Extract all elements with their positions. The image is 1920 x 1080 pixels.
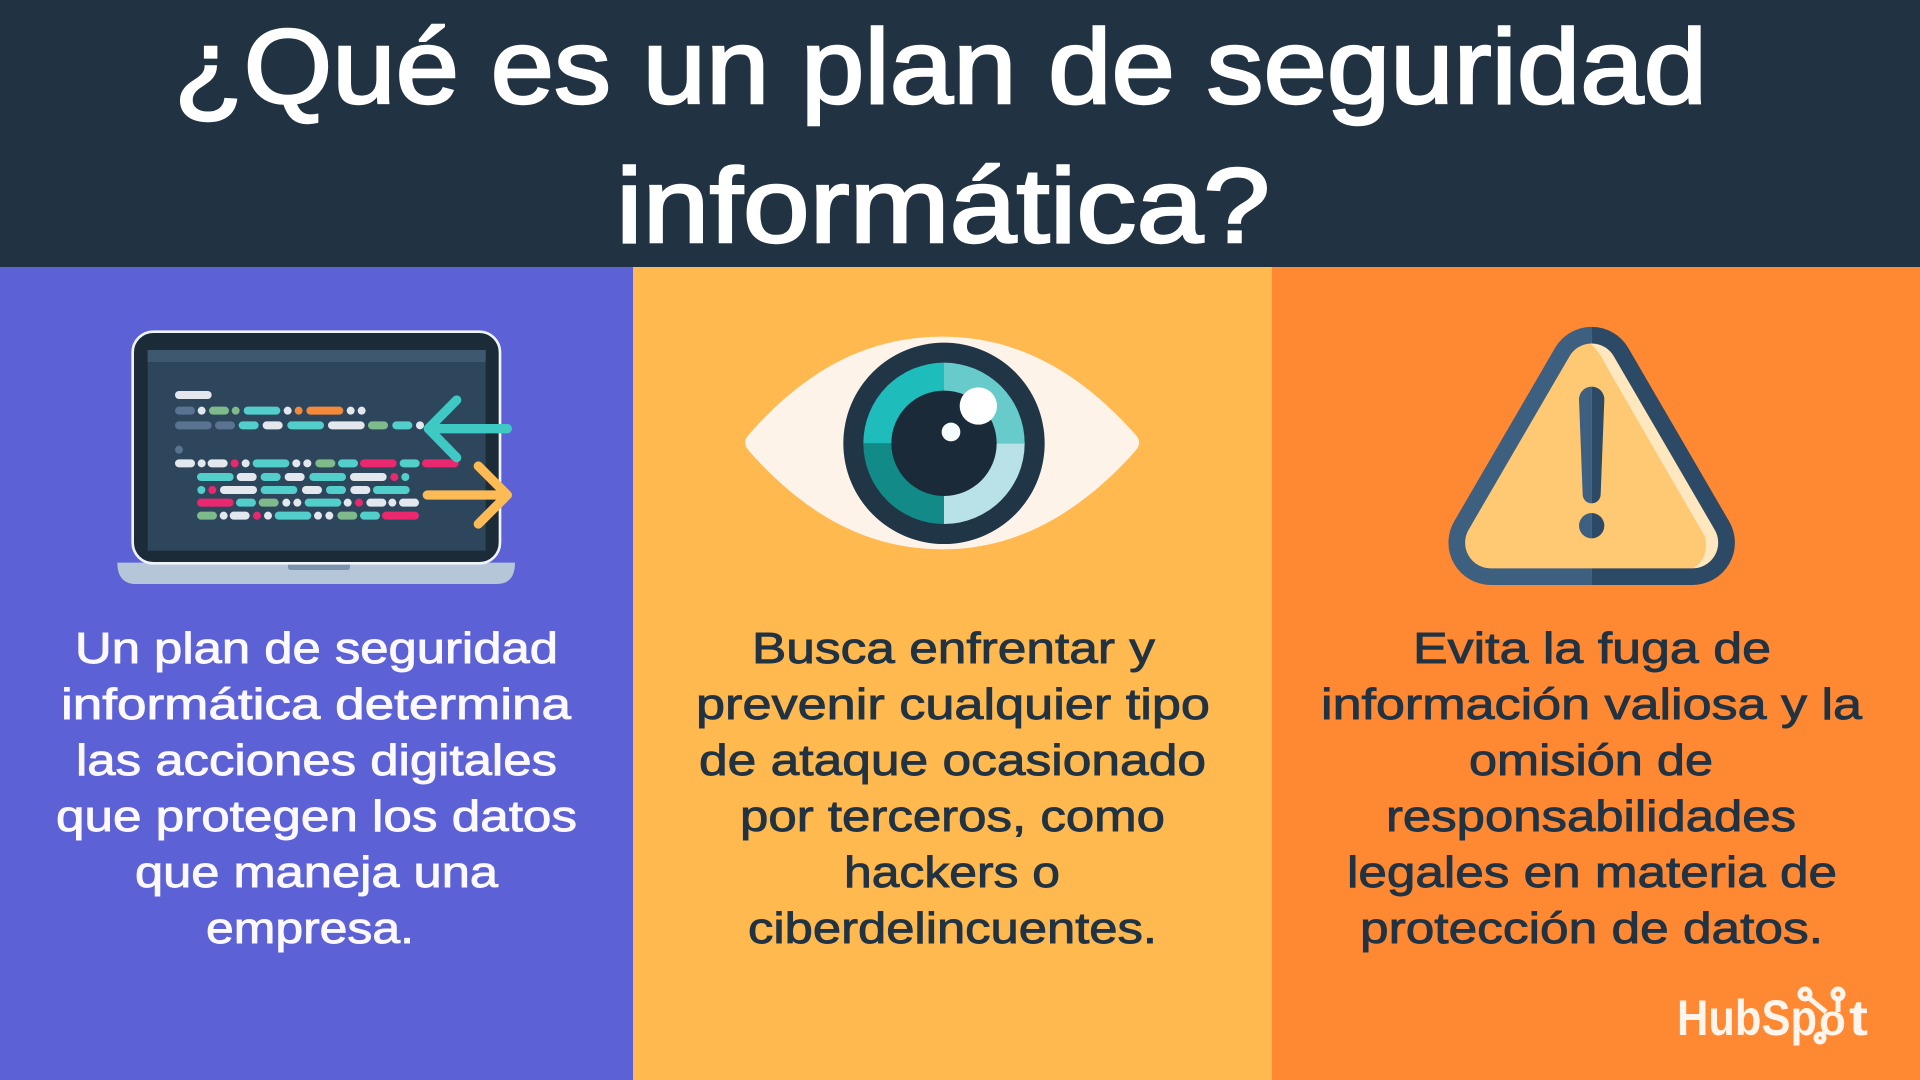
panel: prevenir ataques (yellow): [633, 267, 1272, 1080]
text: description 3: [1321, 624, 1863, 953]
text: description 1: Un plan de seguridad: [75, 624, 558, 673]
text: description 2: [696, 624, 1210, 953]
code lines: [175, 391, 459, 520]
panel: fuga de información (orange): [1272, 267, 1920, 1080]
text: description 3: protección de datos.: [1360, 904, 1823, 953]
laptop body: [117, 332, 515, 584]
text: description 2: Busca enfrentar y: [752, 624, 1155, 673]
text: description 3: legales en materia de: [1347, 848, 1837, 897]
logo: HubSpot: t: [1849, 990, 1868, 1046]
text: description 1: informática determina: [61, 680, 572, 729]
text: description 2: hackers o: [844, 848, 1060, 897]
title: ¿Qué es un plan de seguridad: [174, 8, 1707, 126]
text: description 1: [56, 624, 577, 953]
text: description 2: por terceros, como: [740, 792, 1165, 841]
text: description 1: que maneja una: [135, 848, 499, 897]
text: description 3: Evita la fuga de: [1413, 624, 1771, 673]
arrow: yellow right: [427, 466, 507, 524]
text: description 3: responsabilidades: [1386, 792, 1796, 841]
text: description 2: prevenir cualquier tipo: [696, 680, 1210, 729]
title: informática?: [616, 147, 1270, 265]
text: description 1: empresa.: [206, 904, 414, 953]
icon: warning triangle: [1457, 335, 1727, 577]
icon: laptop with code and arrows: [117, 332, 515, 584]
text: description 3: información valiosa y la: [1321, 680, 1863, 729]
logo: HubSpot: o: [1819, 996, 1846, 1045]
header band with title: [0, 0, 1920, 267]
text: description 3: omisión de: [1469, 736, 1713, 785]
text: description 1: que protegen los datos: [56, 792, 577, 841]
logo: HubSpot: HubSp: [1677, 990, 1817, 1046]
panel: plan de seguridad (purple): [0, 267, 633, 1080]
text: description 1: las acciones digitales: [76, 736, 557, 785]
arrow: teal left: [428, 400, 507, 458]
text: description 2: de ataque ocasionado: [699, 736, 1206, 785]
icon: eye: [745, 337, 1139, 549]
text: description 2: ciberdelincuentes.: [748, 904, 1157, 953]
title: [174, 8, 1707, 265]
